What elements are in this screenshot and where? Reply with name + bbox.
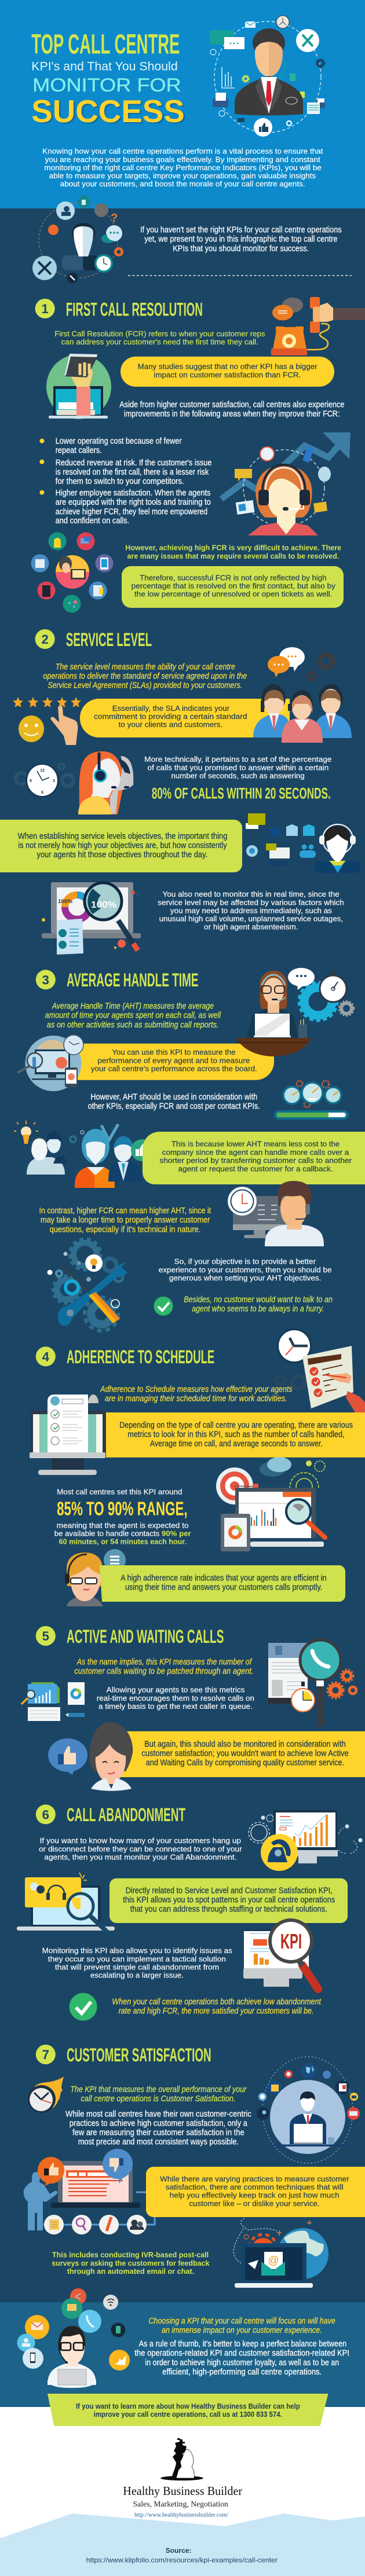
bullet list: Lower operating cost because of fewer [56, 437, 182, 446]
text: definition: or disconnect before they can be connected to one of your [39, 1845, 242, 1853]
panel: SLA commitment [80, 699, 290, 737]
banner: call to action [48, 2394, 328, 2426]
illustration: laptop and magnifier 100%: 100% [58, 898, 72, 904]
text: monitor in real time [158, 890, 344, 931]
illustration: feedback laptop with person and icons [24, 2149, 155, 2234]
callout intro text: If you haven't set the right KPIs for your call centre operations [140, 226, 342, 235]
text: real-time metrics: real-time encourages them to resolve calls on [97, 1694, 254, 1702]
text: definition [70, 2085, 247, 2104]
text: technical definition: of calls that you promised to answer within a certain [147, 764, 329, 772]
intro paragraph: you are reaching your business goals effectively. By implementing and constant [45, 156, 320, 164]
badge 4 [36, 1346, 56, 1366]
text: surveys: This includes conducting IVR-based post-call [52, 2251, 209, 2259]
icon: gauges with progress bar [274, 1081, 349, 1120]
bullet list: Higher employee satisfaction. When the agents [56, 489, 210, 498]
text: monitor in real time: service level may be affected by various factors which [158, 898, 344, 907]
text: hurry note [184, 1295, 333, 1313]
text: 90 percent per hour: be available to handle contacts 90% per [54, 1530, 191, 1538]
text: service level definition: operations to deliver the standard of service agreed upon in the [43, 672, 247, 681]
text: monitoring issues: Monitoring this KPI also allows you to identify issues as [42, 1947, 232, 1955]
text: service level definition: Service Level Agreement (SLAs) provided to your customers. [48, 681, 242, 691]
panel: lower AHT: This is because lower AHT means less cost to the [171, 1140, 340, 1148]
text: monitor in real time: or high agent absenteeism. [204, 923, 298, 931]
illustration: woman agent at desk with stopwatch [236, 968, 354, 1056]
panel: common techniques: satisfaction, there are common techniques that will [166, 2184, 343, 2192]
section 2: Service Level [0, 629, 360, 955]
text: AHT definition: Average Handle Time (AHT) measures the average [52, 1002, 214, 1011]
panel: lower AHT [143, 1132, 365, 1184]
illustration: laptop and magnifier 100% [42, 882, 141, 955]
footer light blue mountains [0, 2513, 365, 2576]
illustration: clock and checklist [276, 1329, 365, 1412]
text: low abandonment note [112, 1998, 322, 2016]
badge 6 [36, 1804, 56, 1824]
icon: book over laptop [46, 354, 111, 419]
panel: therefore [122, 566, 344, 608]
logo: chess pieces [160, 2438, 203, 2480]
text: definition: call centre operations is Customer Satisfaction. [81, 2094, 235, 2104]
icon: chat bubbles and gears [268, 647, 335, 681]
text: use with other KPIs: However, AHT should be used in consideration with [90, 1092, 257, 1102]
text: use with other KPIs: other KPIs, especially FCR and cost per contact KPIs. [88, 1102, 260, 1111]
hero background [0, 0, 365, 208]
illustration: chart docs, tablet and keyboard [21, 1682, 85, 1721]
text: generous objectives: So, if your objective is to provide a better [174, 1258, 316, 1266]
intro paragraph: monitoring of the right call centre Key Performance Indicators (KPIs), you will be [44, 164, 322, 172]
logo wordmark: http://www.healthybusinessbuilder.com/ [134, 2512, 228, 2518]
conclusion text: focus: an immense impact on your customer experience. [162, 2326, 322, 2335]
panel: lower AHT: agent or request the customer for a callback. [178, 1165, 333, 1173]
title: SUCCESS [31, 93, 185, 129]
text: higher FCR, higher AHT: In contrast, higher FCR can mean higher AHT, since it [39, 1206, 211, 1216]
panel: therefore: percentage that is resolved on the first contact, but also by [132, 582, 336, 590]
illustration: globe, gear and email laptop [233, 2218, 329, 2288]
conclusion text: focus [148, 2317, 335, 2335]
text: monitoring issues: that will prevent simple call abandonment from [55, 1963, 219, 1971]
badge 5: 5 [42, 1629, 49, 1643]
text: real-time metrics [97, 1686, 254, 1711]
intro paragraph: able to measure your targets, improve your operations, gain valuable insights [49, 172, 316, 180]
bullet list: Reduced revenue at risk. If the customer's issue [56, 458, 211, 468]
title [31, 30, 186, 130]
text: definition: The KPI that measures the overall performance of your [70, 2085, 247, 2094]
text: 90 percent per hour [54, 1522, 191, 1546]
logo wordmark: Healthy Business Builder [123, 2484, 242, 2498]
panel: consistency [0, 820, 242, 872]
text: surveys: through an automated email or chat. [67, 2267, 194, 2276]
heading 7: CUSTOMER SATISFACTION [67, 2045, 211, 2065]
text: FCR definition: First Call Resolution (FCR) refers to when your customer reps [54, 330, 265, 338]
source: https://www.klipfolio.com/resources/kpi-examples/call-center [86, 2556, 278, 2564]
text: generous objectives [159, 1258, 332, 1282]
text: higher FCR, higher AHT: may take a longer time to properly answer customer [41, 1216, 210, 1225]
illustration: agent with mail and contact icons [246, 813, 360, 873]
panel: customer satisfaction caveat [118, 1731, 365, 1777]
badge 3: 3 [42, 973, 49, 987]
panel: high adherence rate [100, 1565, 345, 1602]
footer white background [0, 2407, 365, 2576]
icon: green check [154, 1297, 173, 1316]
illustration: monitor with schedule [30, 1395, 105, 1475]
section 3: Average Handle Time [14, 968, 365, 1331]
text: definition: customer calls waiting to be patched through an agent. [74, 1667, 253, 1676]
text: service level definition [43, 663, 247, 691]
bullet list: repeat callers. [56, 446, 102, 456]
conclusion text: focus: Choosing a KPI that your call centre will focus on will have [148, 2317, 335, 2326]
badge 2: 2 [41, 632, 49, 647]
bullet list: achieve higher FCR, they feel more empowered [56, 507, 207, 516]
panel: lower AHT: shorter period by transferring customer calls to another [159, 1157, 352, 1165]
bullet list [39, 437, 211, 526]
title: KPI's and That You Should [31, 60, 178, 74]
text: monitoring issues: escalating to a larger issue. [90, 1972, 184, 1980]
icon: clock and gears: 6 [41, 791, 43, 795]
text: adherence definition: Adherence to Schedule measures how effective your agents [100, 1385, 293, 1395]
badge 7: 7 [42, 2047, 49, 2062]
text: other improvements: improvements in the following areas when they improve their FCR: [124, 409, 340, 419]
icon: stars, smiley and pointing hand [13, 697, 81, 745]
heading 1: FIRST CALL RESOLUTION [66, 299, 203, 320]
bullet list: are equipped with the right tools and training to [56, 498, 211, 507]
text: customer-centric practices: most precise and most consistent ways possible. [78, 2138, 239, 2147]
illustration: woman with glasses and chat bubble [65, 1549, 126, 1606]
source [86, 2546, 278, 2564]
illustration: agent bust with orbit icons [32, 196, 123, 283]
icon: customer service icon cluster [31, 533, 114, 612]
illustration: agent with monitor and clock [228, 1181, 324, 1246]
icon: clock and gears: 12 [40, 769, 45, 773]
badge 5 [36, 1626, 56, 1646]
title: MONITOR FOR [33, 75, 182, 96]
callout intro text: yet, we present to you in this infographic the top call centre [144, 235, 337, 244]
panel: common techniques: While there are varying practices to measure customer [160, 2175, 349, 2183]
text: adherence definition [100, 1385, 293, 1404]
illustration: KPI magnifier and monitor: KPI [280, 1929, 302, 1953]
icon: monitor, clock and phone [17, 1035, 83, 1091]
section 1: First Call Resolution [31, 297, 365, 612]
logo wordmark [123, 2484, 242, 2518]
panel: SLA commitment: Essentially, the SLA indicates your [112, 704, 229, 713]
logo wordmark: Sales, Marketing, Negotiation [133, 2500, 228, 2509]
text: real-time metrics: Allowing your agents to see this metrics [107, 1686, 244, 1694]
text: customer-centric practices [65, 2109, 251, 2147]
bullet list: for them to switch to your competitors. [56, 477, 184, 486]
intro paragraph [42, 148, 323, 188]
text: low abandonment note: rate and high FCR, the more satisfied your customers will be. [119, 2007, 314, 2016]
text: definition [74, 1657, 253, 1676]
text: monitor in real time: unusual high call volume, unplanned service outages, [159, 915, 343, 923]
text: real-time metrics: a timely basis to get the next caller in queue. [98, 1702, 253, 1711]
panel: measure performance: your call centre's performance across the board. [91, 1065, 257, 1073]
conclusion teal background [0, 2302, 365, 2408]
text: technical definition: number of seconds, such as answering [171, 772, 305, 780]
text: customer-centric practices: few are measuring their customer satisfaction in the [72, 2129, 244, 2138]
panel: measure performance: performance of every agent and to measure [97, 1056, 250, 1065]
illustration: laptop, headset and magnifier [17, 1873, 115, 1936]
text: low abandonment note: When your call centre operations both achieve low abandonment [112, 1998, 322, 2007]
icon: clock and gears: 3 [53, 779, 55, 783]
text: hurry note: Besides, no customer would want to talk to an [184, 1295, 333, 1304]
title: TOP CALL CENTRE [31, 30, 180, 60]
text: higher FCR, higher AHT: questions, especially if it's technical in nature. [50, 1225, 200, 1234]
badge 6: 6 [42, 1807, 49, 1822]
heading 3: AVERAGE HANDLE TIME [67, 970, 198, 990]
panel: high adherence rate: A high adherence rate indicates that your agents are efficient in [121, 1573, 327, 1583]
illustration: call centre agent with icon ring [210, 16, 325, 137]
heading 5: ACTIVE AND WAITING CALLS [67, 1626, 224, 1647]
section 7: Customer Satisfaction [24, 2045, 365, 2288]
text: definition: agents, then you must monitor your Call Abandonment. [44, 1853, 237, 1861]
panel: measure performance: You can use this KPI to measure the [112, 1048, 236, 1056]
panel: metrics: Average time on call, and average seconds to answer. [150, 1439, 323, 1448]
callout: biggest impact: Many studies suggest that no other KPI has a bigger [138, 363, 317, 371]
intro paragraph: about your customers, and boost the morale of your call centre agents. [60, 180, 305, 188]
panel: directly related: this KPI allows you to spot patterns in your call centre operations [123, 1896, 335, 1905]
illustration: target, laptop and analytics [216, 1457, 325, 1551]
illustration: agent bust with orbit icons: ? [111, 212, 118, 225]
illustration: three call agents [253, 684, 352, 743]
text: monitoring issues: they occur so you can implement a tactical solution [48, 1955, 226, 1963]
illustration: agent in circle with service icons [257, 2057, 360, 2163]
illustration: phone magnifier, browser and gears [268, 1640, 356, 1727]
text: monitor in real time: you may need to address immediately, such as [170, 907, 332, 915]
illustration: gears and tools [48, 1239, 127, 1331]
badge 1: 1 [41, 302, 49, 316]
source: Source: [166, 2546, 191, 2555]
title: MONITOR FOR [32, 74, 181, 96]
badge 1 [35, 299, 55, 318]
icon: clock and gears [16, 764, 74, 797]
banner: call to action: improve your call centre operations, call us at 1300 833 574. [94, 2410, 282, 2419]
illustration: monitor chart and phone [249, 1810, 363, 1871]
text: hurry note: agent who seems to be always in a hurry. [192, 1304, 324, 1313]
section 6: Call Abandonment [17, 1804, 363, 2021]
panel: metrics [106, 1412, 365, 1458]
text: AHT definition [45, 1002, 221, 1030]
text: customer-centric practices: practices to achieve high customer satisfaction, only a [70, 2119, 248, 2128]
icon: female agent with rising arrow [221, 432, 351, 535]
panel: therefore: Therefore, successful FCR is not only reflected by high [140, 574, 327, 582]
banner: call to action: If you want to learn more about how Healthy Business Builder can help [76, 2402, 300, 2410]
bullet list: and confident on calls. [56, 516, 129, 526]
callout: biggest impact: impact on customer satisfaction than FCR. [154, 371, 301, 379]
heading 4: ADHERENCE TO SCHEDULE [67, 1346, 214, 1367]
text: higher FCR, higher AHT [39, 1206, 211, 1234]
icon: rotary telephone and hand [271, 297, 365, 355]
text: generous objectives: generous when setting your AHT objectives. [169, 1274, 321, 1282]
conclusion text: balance [134, 2340, 349, 2377]
text: definition: As the name implies, this KPI measures the number of [76, 1657, 253, 1667]
text: technical definition: More technically, it pertains to a set of the percentage [144, 755, 331, 764]
text: use with other KPIs [88, 1092, 260, 1111]
badge 2 [35, 629, 55, 649]
callout intro text: KPIs that you should monitor for success. [173, 244, 309, 254]
bullet list: is resolved on the first call, there is a lesser risk [56, 468, 209, 477]
panel: lower AHT: company since the agent can handle more calls over a [162, 1148, 349, 1157]
section 5: Active and Waiting Calls [21, 1626, 365, 1791]
text: 90 percent per hour: 60 minutes, or 54 minutes each hour. [59, 1538, 187, 1546]
text: FCR definition: can address your customer's need the first time they call. [61, 338, 258, 346]
intro paragraph: Knowing how your call centre operations perform is a vital process to ensure that [42, 148, 323, 156]
conclusion: agent with floating icons [17, 2288, 130, 2388]
panel: directly related: that you can address through staffing or technical solutions. [130, 1905, 327, 1914]
text: AHT definition: amount of time your agents spent on each call, as well [45, 1011, 221, 1021]
icon: flaming clock [28, 2076, 64, 2113]
callout intro text [140, 226, 342, 254]
heading 6: CALL ABANDONMENT [67, 1804, 185, 1825]
icon: clock and gears: 9 [30, 779, 32, 783]
panel: common techniques: customer like – or dislike your service. [189, 2200, 320, 2208]
text: definition: If you want to know how many of your customers hang up [40, 1837, 241, 1845]
text: generous objectives: experience to your customers, then you should be [159, 1266, 332, 1274]
text: difficult to achieve: are many issues that may require several calls to be resolved. [127, 552, 339, 560]
heading 2: SERVICE LEVEL [66, 629, 152, 650]
text: AHT definition: as on other activities such as submitting call reports. [47, 1021, 219, 1030]
icon: green check large [70, 1993, 97, 2021]
text: 85% to 90% intro: Most call centres set this KPI around [57, 1488, 182, 1496]
badge 3 [36, 970, 56, 989]
text: service level definition: The service level measures the ability of your call centre [56, 663, 235, 672]
panel: directly related: Directly related to Service Level and Customer Satisfaction KPI, [126, 1887, 333, 1896]
badge 4: 4 [42, 1349, 50, 1364]
panel: therefore: the low percentage of unresolved or open tickets as well. [134, 590, 332, 599]
conclusion text: balance: efficient, high-performing call centre operations. [162, 2368, 322, 2377]
panel: consistency: is not merely how high your objectives are, but how consistently [18, 841, 227, 850]
text: monitor in real time: You also need to monitor this in real time, since the [163, 890, 340, 898]
illustration: agents in profile [78, 751, 133, 814]
illustration: woman with thumbs up bubble [48, 1722, 133, 1791]
conclusion text: balance: in order to achieve high customer loyalty, as well as to be an [145, 2358, 339, 2368]
text: surveys [52, 2251, 209, 2276]
badge 7 [36, 2045, 56, 2064]
text: technical definition [144, 755, 331, 780]
panel: consistency: When establishing service levels objectives, the important thing [18, 832, 227, 841]
title: SUCCESS [33, 94, 186, 130]
panel: common techniques [146, 2167, 365, 2217]
panel: common techniques: help you effectively keep track on just how much [170, 2192, 340, 2200]
text: other improvements [119, 400, 344, 419]
text: FCR definition [54, 330, 265, 346]
illustration: laptop and magnifier 100%: 100% [91, 900, 116, 910]
section 4: Adherence to Schedule [30, 1329, 365, 1606]
panel: high adherence rate: using their time and answers your customers calls promptly. [125, 1583, 322, 1592]
illustration: globe, gear and email laptop: @ [268, 2255, 279, 2267]
panel: consistency: your agents hit those objectives throughout the day. [37, 850, 207, 860]
text: adherence definition: are in managing their scheduled time for work activities. [105, 1395, 287, 1404]
panel: SLA commitment: commitment to providing a certain standard [94, 713, 247, 721]
text: 90 percent per hour: meaning that the agent is expected to [57, 1522, 189, 1530]
panel: SLA commitment: to your clients and customers. [119, 721, 222, 729]
text: difficult to achieve: However, achieving high FCR is very difficult to achieve. There [125, 544, 341, 552]
text: definition [39, 1837, 242, 1861]
text: difficult to achieve [125, 544, 341, 560]
text: monitoring issues [42, 1947, 232, 1980]
illustration: team with bulb, check and thumbs up [14, 1121, 153, 1188]
callout: biggest impact [121, 357, 334, 387]
stat: 85% to 90% range: 85% TO 90% RANGE, [57, 1498, 188, 1520]
panel: measure performance [70, 1044, 274, 1080]
panel: directly related [110, 1878, 348, 1923]
illustration: KPI magnifier and monitor [243, 1920, 318, 1989]
text: customer-centric practices: While most call centres have their own customer-centric [65, 2109, 251, 2119]
text: surveys: surveys or asking the customers for feedback [52, 2259, 209, 2267]
panel: customer satisfaction caveat: and Waiting Calls by compromising quality customer service. [146, 1759, 344, 1768]
